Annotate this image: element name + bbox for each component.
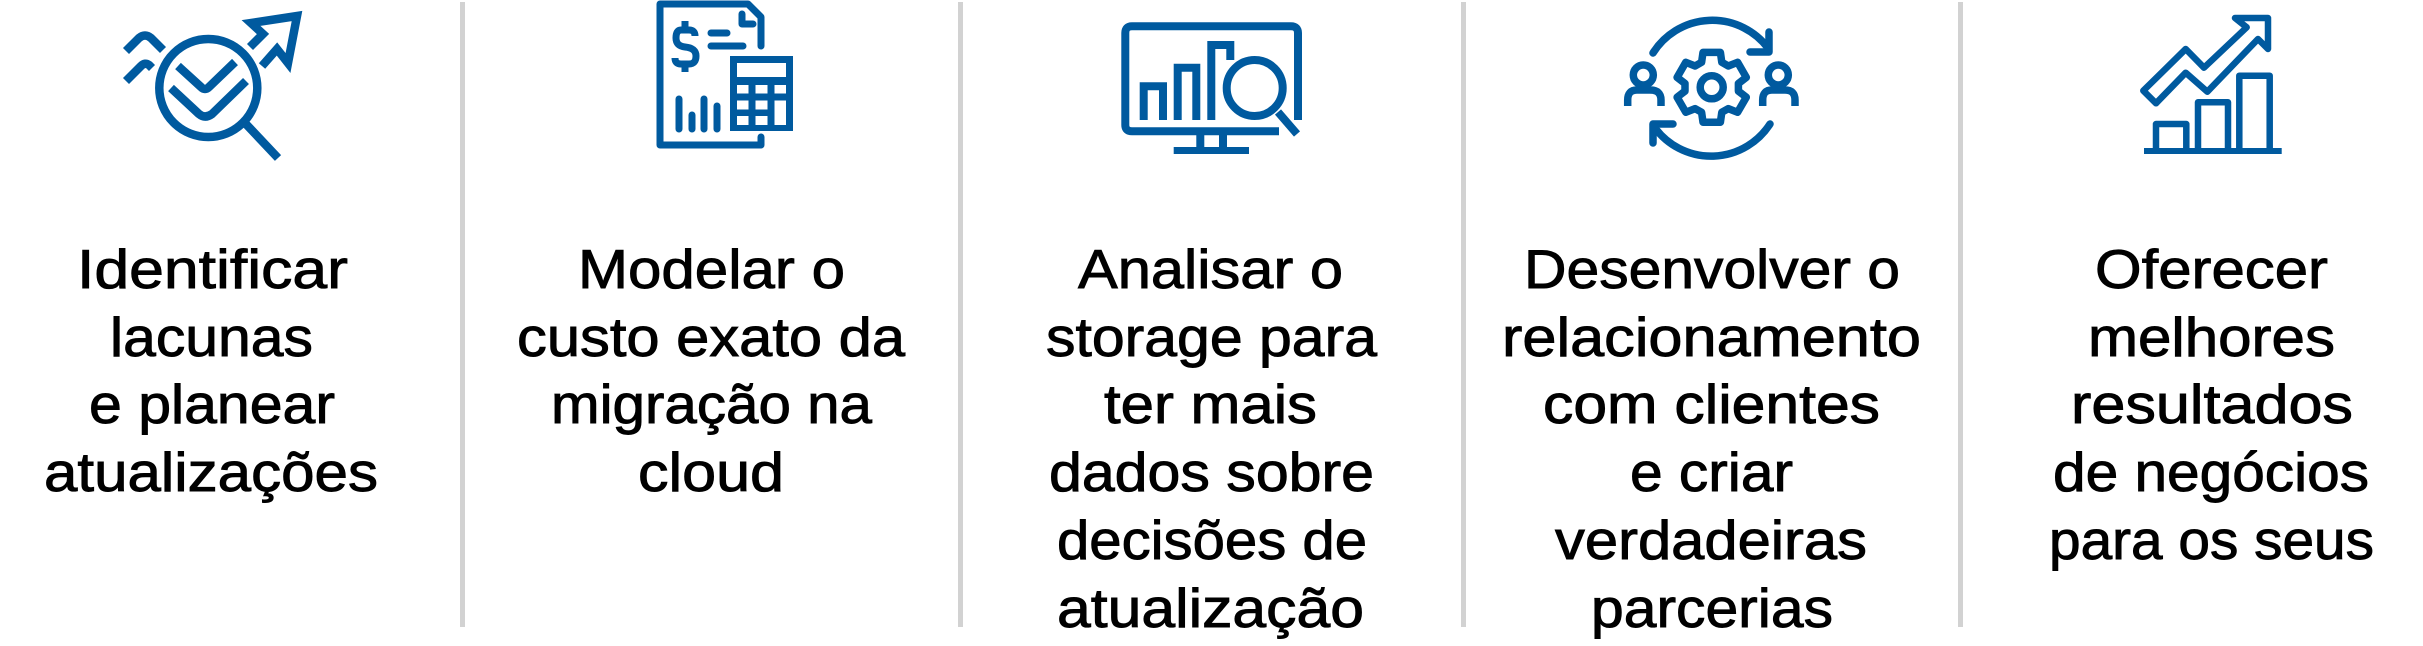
text: deliver better business results: resultados: [2071, 373, 2353, 435]
icon: rising bar chart with arrow: [2143, 18, 2282, 154]
text: model cloud migration cost: cloud: [638, 441, 784, 503]
panel: model cloud migration cost: [517, 4, 905, 503]
text: identify gaps: [44, 238, 378, 503]
text: analyse storage: decisões de: [1057, 509, 1367, 571]
text: model cloud migration cost: [517, 238, 905, 503]
text: identify gaps: lacunas: [110, 306, 313, 368]
text: develop customer relationships: Desenvolver o: [1524, 238, 1900, 300]
panel: identify gaps: [44, 16, 378, 503]
text: deliver better business results: Oferecer: [2095, 238, 2328, 300]
text: analyse storage: dados sobre: [1049, 441, 1374, 503]
text: analyse storage: ter mais: [1104, 373, 1317, 435]
text: identify gaps: Identificar: [77, 238, 348, 300]
panel: deliver better business results: [2049, 18, 2374, 571]
icon: monitor with bar chart and magnifier: [1125, 26, 1298, 154]
text: develop customer relationships: relacionamento: [1502, 306, 1921, 368]
panel: develop customer relationships: [1502, 20, 1921, 639]
text: develop customer relationships: verdadeiras: [1555, 509, 1867, 571]
text: develop customer relationships: e criar: [1630, 441, 1793, 503]
text: model cloud migration cost: Modelar o: [578, 238, 845, 300]
panel: analyse storage: [1046, 26, 1377, 639]
icon: gear, people and cycle arrows: [1628, 20, 1795, 156]
text: develop customer relationships: [1502, 238, 1921, 639]
text: model cloud migration cost: migração na: [551, 373, 872, 435]
text: analyse storage: Analisar o: [1078, 238, 1343, 300]
text: identify gaps: atualizações: [44, 441, 378, 503]
text: analyse storage: storage para: [1046, 306, 1377, 368]
text: analyse storage: [1046, 238, 1377, 639]
text: deliver better business results: [2049, 238, 2374, 571]
text: identify gaps: e planear: [89, 373, 335, 435]
text: deliver better business results: melhores: [2088, 306, 2335, 368]
text: model cloud migration cost: custo exato da: [517, 306, 905, 368]
text: analyse storage: atualização: [1057, 577, 1364, 639]
icon: document with calculator: [660, 4, 793, 145]
text: develop customer relationships: parcerias: [1591, 577, 1833, 639]
text: deliver better business results: para os seus: [2049, 509, 2374, 571]
text: deliver better business results: de negócios: [2053, 441, 2369, 503]
icon: magnifier with chevrons and arrow: [126, 16, 297, 158]
text: develop customer relationships: com clientes: [1543, 373, 1880, 435]
